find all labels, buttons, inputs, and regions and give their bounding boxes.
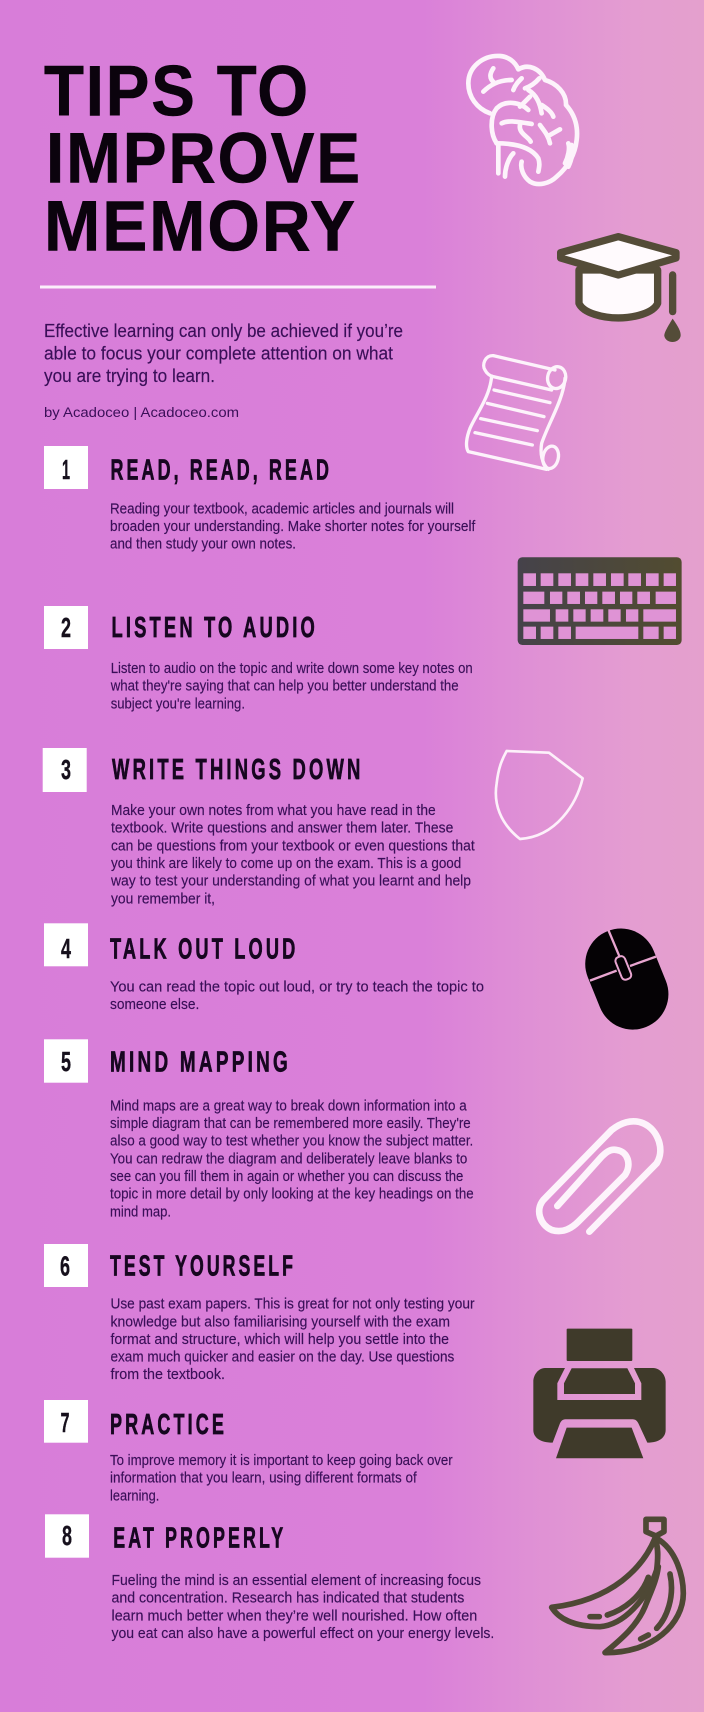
body text 5: mind map. — [110, 1204, 171, 1220]
body text 6: knowledge but also familiarising yourself with the exam — [110, 1314, 450, 1330]
body text 8: learn much better when they’re well nourished. How often — [112, 1608, 477, 1624]
number box 2: 2 — [61, 612, 71, 643]
panel: tip 4 — [44, 923, 484, 1013]
body text 8: Fueling the mind is an essential element of increasing focus — [112, 1573, 481, 1589]
heading: write things down: WRITE THINGS DOWN — [112, 754, 364, 786]
intro text — [44, 321, 403, 386]
heading: eat properly: EAT PROPERLY — [113, 1522, 286, 1554]
body text 6: Use past exam papers. This is great for not only testing your — [110, 1297, 475, 1313]
body text 3: can be questions from your textbook or even questions that — [111, 838, 475, 854]
number box 7 — [44, 1400, 88, 1443]
panel: tip 7 — [44, 1400, 453, 1504]
body text 4: someone else. — [110, 997, 199, 1013]
intro text: able to focus your complete attention on what — [44, 344, 393, 364]
body text 3: textbook. Write questions and answer them later. These — [111, 821, 453, 837]
number box 8 — [45, 1514, 89, 1558]
body text 5: see can you fill them in again or whether you can discuss the — [110, 1169, 463, 1185]
body text 2: what they're saying that can help you better understand the — [110, 679, 459, 695]
body text 4: You can read the topic out loud, or try to teach the topic to — [110, 979, 484, 995]
title — [44, 52, 362, 266]
panel: tip 8 — [45, 1514, 494, 1642]
body text 7: learning. — [110, 1488, 159, 1504]
number box 5 — [44, 1039, 88, 1083]
number box 6: 6 — [60, 1250, 70, 1282]
body text 6: from the textbook. — [110, 1367, 225, 1383]
number box 3 — [43, 748, 87, 792]
number box 8: 8 — [62, 1520, 72, 1551]
body text 3: you remember it, — [111, 891, 215, 907]
body text 2 — [110, 661, 473, 712]
body text 2: Listen to audio on the topic and write down some key notes on — [111, 661, 473, 677]
body text 4 — [110, 979, 484, 1013]
icon: graduation cap — [561, 237, 681, 342]
body text 8: you eat can also have a powerful effect on your energy levels. — [112, 1626, 494, 1642]
number box 3: 3 — [61, 754, 71, 785]
title: TIPS TO — [44, 52, 310, 132]
body text 1 — [110, 501, 476, 553]
body text 5: topic in more detail by only looking at the key headings on the — [110, 1187, 474, 1203]
title: MEMORY — [44, 188, 357, 266]
number box 1: 1 — [62, 454, 70, 485]
body text 1: broaden your understanding. Make shorter notes for yourself — [110, 519, 476, 535]
body text 5: also a good way to test whether you know the subject matter. — [110, 1134, 473, 1150]
body text 7: To improve memory it is important to keep going back over — [110, 1453, 453, 1469]
byline: by Acadoceo | Acadoceo.com — [44, 405, 239, 420]
icon: paper scroll — [467, 356, 568, 470]
icon: brain — [468, 56, 577, 184]
body text 6: exam much quicker and easier on the day. Use questions — [110, 1350, 454, 1366]
number box 4 — [44, 923, 88, 966]
number box 6 — [44, 1244, 88, 1287]
body text 2: subject you're learning. — [111, 696, 245, 712]
number box 4: 4 — [61, 933, 71, 964]
number box 2 — [44, 606, 88, 649]
heading: read, read, read: READ, READ, READ — [110, 454, 332, 486]
icon: printer — [533, 1329, 666, 1458]
body text 8 — [112, 1573, 494, 1642]
body text 8: and concentration. Research has indicated that students — [112, 1591, 464, 1607]
number box 7: 7 — [60, 1407, 70, 1438]
body text 5: Mind maps are a great way to break down information into a — [110, 1098, 468, 1114]
body text 1: and then study your own notes. — [110, 537, 296, 553]
body text 5 — [110, 1098, 474, 1220]
panel: tip 1 — [44, 446, 476, 553]
panel: tip 3 — [43, 748, 475, 907]
number box 5: 5 — [61, 1046, 71, 1077]
body text 6: format and structure, which will help you settle into the — [110, 1332, 449, 1348]
body text 6 — [110, 1297, 475, 1383]
panel: tip 2 — [44, 606, 473, 712]
heading: mind mapping: MIND MAPPING — [110, 1046, 291, 1078]
body text 1: Reading your textbook, academic articles and journals will — [110, 501, 454, 517]
icon: computer mouse — [575, 918, 679, 1040]
body text 5: simple diagram that can be remembered more easily. They're — [110, 1116, 471, 1132]
body text 3: Make your own notes from what you have read in the — [111, 803, 436, 819]
body text 3: you think are likely to come up on the exam. This is a good — [111, 856, 461, 872]
heading: listen to audio: LISTEN TO AUDIO — [112, 612, 318, 644]
body text 7 — [110, 1453, 453, 1504]
icon: bananas — [552, 1519, 683, 1653]
panel: tip 6 — [44, 1244, 475, 1383]
body text 5: You can redraw the diagram and deliberately leave blanks to — [110, 1151, 467, 1167]
intro text: Effective learning can only be achieved if you’re — [44, 321, 403, 341]
intro text: you are trying to learn. — [44, 366, 215, 386]
number box 1 — [44, 446, 88, 489]
heading: talk out loud: TALK OUT LOUD — [110, 933, 298, 965]
icon: keyboard — [518, 557, 682, 645]
heading: practice: PRACTICE — [110, 1409, 227, 1441]
body text 7: information that you learn, using different formats of — [110, 1471, 418, 1487]
panel: tip 5 — [44, 1039, 474, 1220]
icon: paperclip — [539, 1121, 660, 1232]
icon: shield — [496, 751, 583, 839]
body text 3: way to test your understanding of what you learnt and help — [110, 874, 471, 890]
body text 3 — [110, 803, 475, 907]
title: IMPROVE — [46, 120, 362, 198]
heading: test yourself: TEST YOURSELF — [110, 1251, 296, 1283]
